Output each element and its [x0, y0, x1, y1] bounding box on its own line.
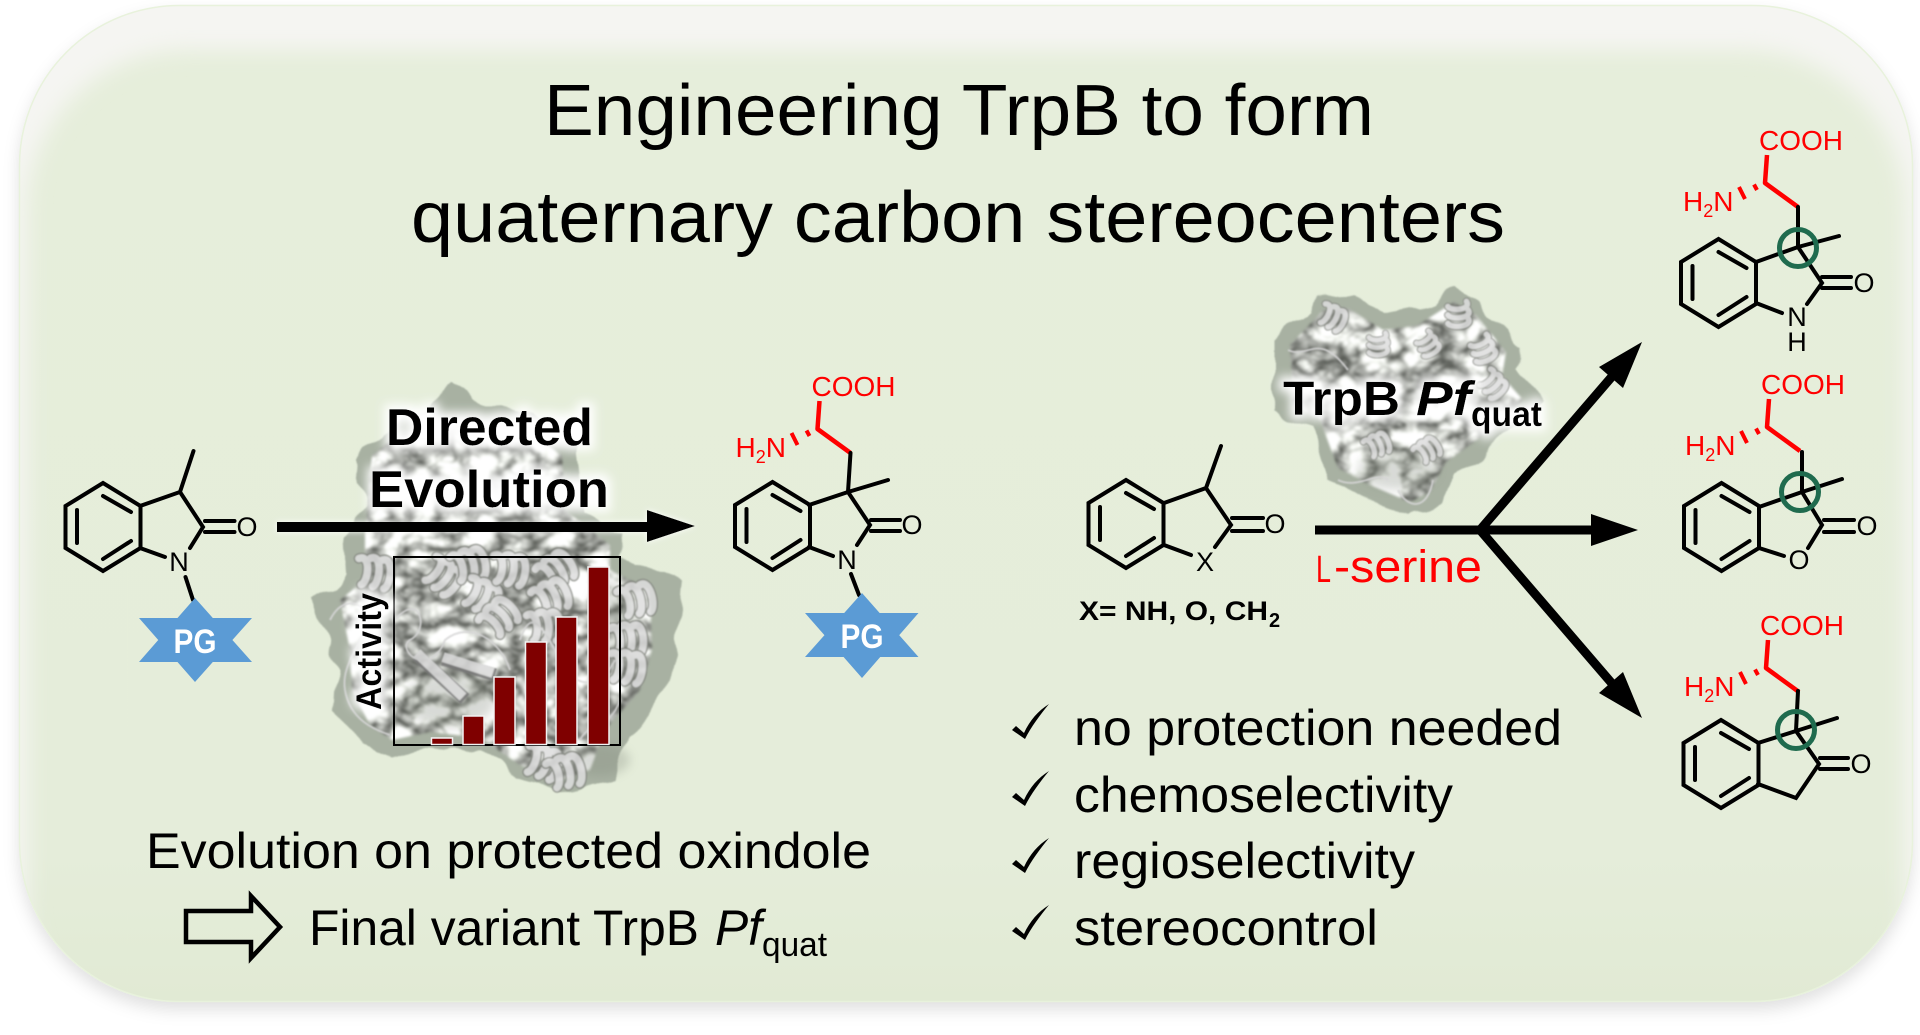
product: benzofuranone [1684, 369, 1878, 575]
molecule: protected oxindole substrate [66, 451, 258, 682]
text: final variant: Final variant TrpB [309, 900, 699, 956]
product: NH oxindole: H [1787, 327, 1807, 357]
heading: directed evolution [369, 399, 609, 519]
bars [432, 567, 609, 744]
molecule: general substrate [1079, 446, 1286, 632]
molecule: general substrate: O [1264, 509, 1286, 539]
icon: hollow arrow [186, 896, 280, 958]
molecule: protected oxindole substrate: O [236, 512, 258, 542]
protecting group star: PG [840, 618, 884, 656]
label: L-serine: -serine [1334, 541, 1482, 592]
title: Engineering TrpB to form [544, 71, 1374, 151]
protecting group star [805, 593, 918, 678]
label: X substituents: X= NH, O, CH [1079, 596, 1268, 626]
item: no protection needed: no protection needed [1074, 700, 1562, 756]
product: benzofuranone: O [1856, 511, 1878, 541]
highlight: stereocenter [1782, 474, 1818, 510]
item: chemoselectivity: chemoselectivity [1074, 767, 1453, 823]
highlight: stereocenter [1780, 230, 1816, 266]
molecule: protected product: N [837, 545, 857, 575]
text: evolution summary [146, 823, 871, 964]
molecule: protected product [735, 371, 923, 678]
title [411, 71, 1505, 258]
molecule: general substrate: X [1196, 547, 1214, 577]
product: NH oxindole: O [1853, 268, 1875, 298]
product: benzofuranone: O [1788, 545, 1810, 575]
label: TrpB Pfquat: TrpB [1283, 373, 1400, 426]
text: final variant [309, 900, 828, 964]
protecting group star: PG [174, 623, 216, 661]
molecule: protected product: O [901, 510, 923, 540]
label: TrpB Pfquat: Pf [1416, 373, 1476, 426]
text: evolution summary: Evolution on protected oxindole [146, 823, 871, 879]
arrow: to indanone [1480, 530, 1642, 718]
highlight: stereocenter [1778, 712, 1814, 748]
label: X substituents: 2 [1269, 610, 1280, 632]
heading: directed evolution: Evolution [369, 461, 609, 519]
molecule: protected oxindole substrate: N [169, 547, 189, 577]
activity bar chart [350, 557, 620, 745]
checklist [1012, 700, 1562, 956]
product: indanone: O [1850, 749, 1872, 779]
product: NH oxindole: N [1787, 302, 1807, 332]
heading: directed evolution: Directed [386, 399, 593, 457]
label: L-serine: L [1316, 549, 1331, 591]
product: indanone [1684, 610, 1872, 808]
protein: directed evolution enzyme [312, 385, 684, 795]
text: final variant: quat [762, 926, 828, 964]
text: final variant: Pf [715, 900, 767, 956]
label: TrpB Pfquat: quat [1471, 395, 1542, 434]
chart frame [394, 557, 620, 745]
item: regioselectivity: regioselectivity [1074, 833, 1415, 889]
reaction arrows [1315, 342, 1642, 718]
arrow: to benzofuranone [1480, 514, 1638, 546]
label: TrpB Pfquat [1283, 373, 1542, 434]
arrow: to indolinone [1480, 342, 1642, 530]
axis label: Activity [350, 593, 389, 710]
protein: TrpB Pfquat enzyme [1275, 288, 1543, 517]
item: stereocontrol: stereocontrol [1074, 900, 1378, 956]
product: NH oxindole [1681, 125, 1875, 357]
title: quaternary carbon stereocenters [411, 178, 1505, 258]
arrow: directed evolution [277, 510, 695, 542]
protecting group star [139, 598, 252, 682]
